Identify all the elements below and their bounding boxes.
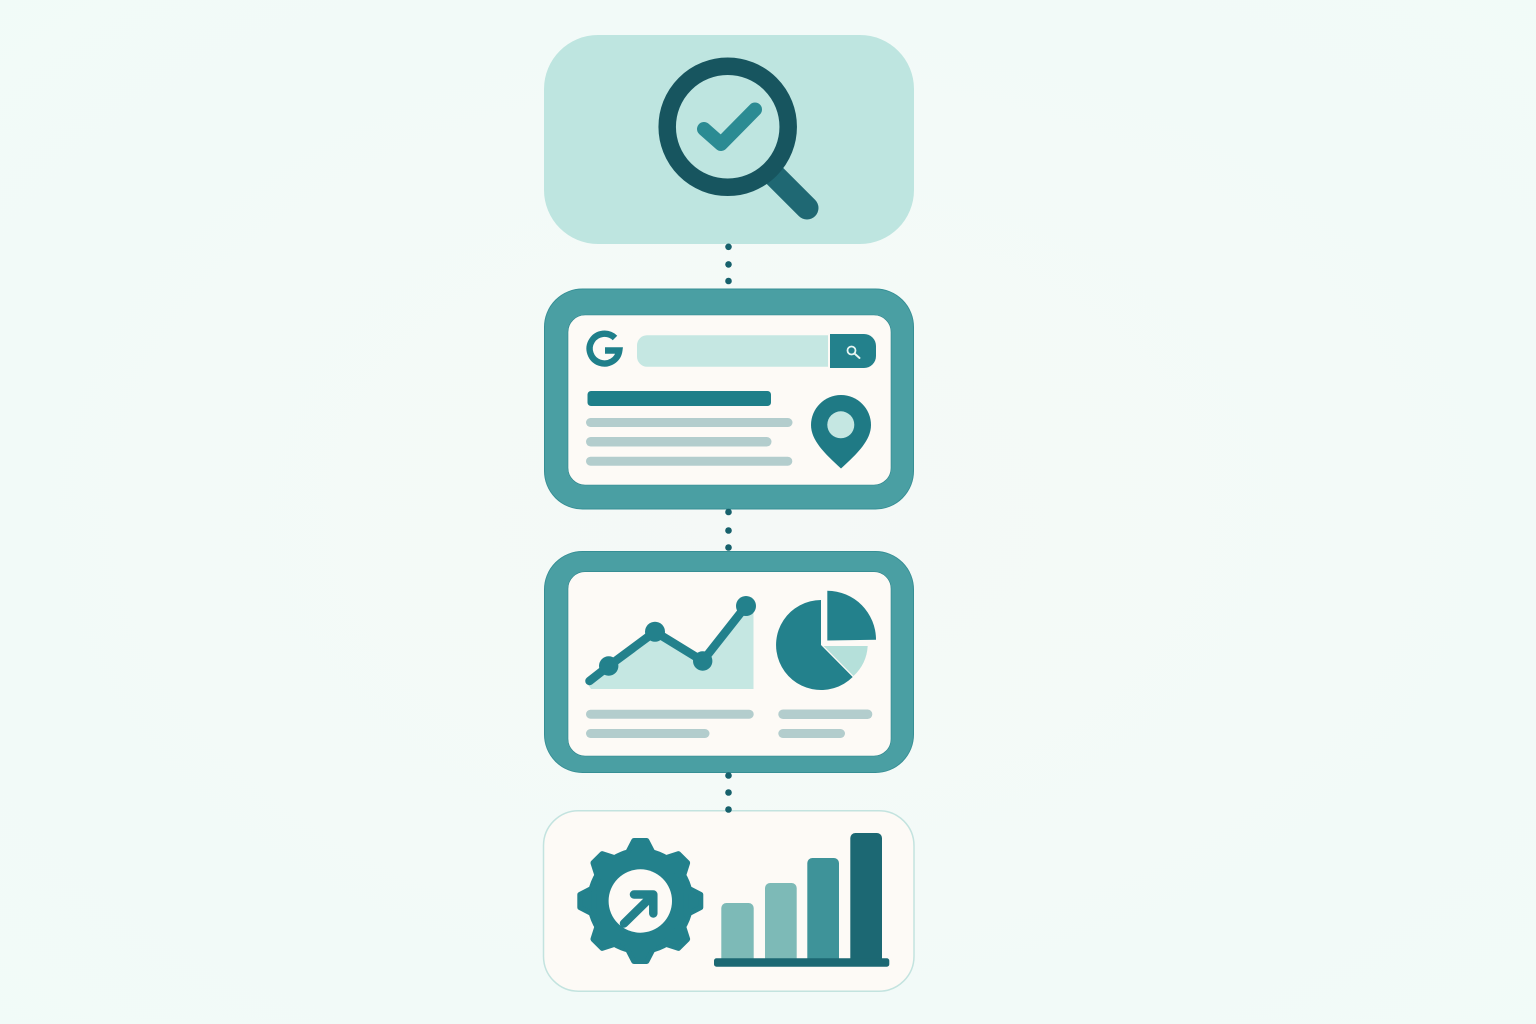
icon: small search glass	[848, 346, 860, 358]
result text lines	[586, 418, 792, 466]
icon: G logo	[590, 334, 619, 363]
panel: analytics dashboard	[544, 552, 914, 772]
chart: line with area	[587, 596, 756, 689]
connector dots: audit to search	[725, 244, 732, 284]
icon: magnifying glass with check	[667, 66, 807, 208]
search bar	[637, 334, 876, 368]
result title bar	[588, 391, 771, 406]
panel: growth results	[544, 811, 914, 991]
icon: map pin	[811, 395, 871, 468]
connector dots: search to analytics	[725, 509, 732, 551]
dashboard text lines	[586, 710, 872, 738]
panel: audit magnifier	[544, 35, 914, 244]
bar chart	[714, 833, 889, 967]
panel: search results	[544, 289, 914, 509]
icon: gear with arrow	[580, 840, 701, 962]
connector dots: analytics to growth	[725, 772, 732, 813]
chart: pie	[776, 591, 876, 690]
